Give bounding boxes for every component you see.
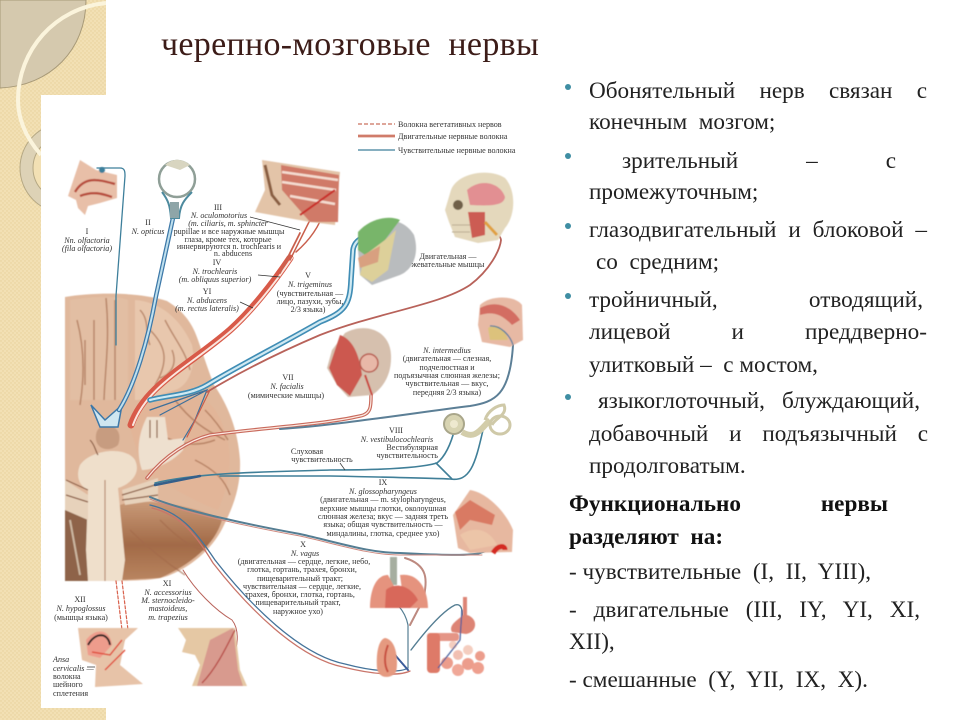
label XI: N. accessorius bbox=[143, 588, 192, 597]
label X bbox=[238, 540, 370, 616]
text: olfactory nerve cont.: конечным мозгом; bbox=[589, 109, 775, 135]
label XI: m. trapezius bbox=[148, 613, 188, 622]
label III: n. abducens bbox=[214, 249, 252, 258]
label leader lines bbox=[87, 217, 345, 667]
legend bbox=[358, 120, 516, 155]
label masticatory: Двигательная — bbox=[420, 252, 477, 261]
label V bbox=[277, 271, 344, 314]
label VII bbox=[248, 373, 324, 400]
label X: наружное ухо) bbox=[273, 607, 323, 616]
nerve VIII bbox=[155, 428, 483, 485]
label V: (чувствительная — bbox=[277, 289, 344, 298]
label IX: языка; общая чувствительность — bbox=[323, 520, 444, 529]
label XII: XII bbox=[74, 595, 86, 604]
label VII: N. facialis bbox=[269, 382, 304, 391]
text: optic nerve cont.: промежуточным; bbox=[589, 179, 758, 205]
label III bbox=[174, 203, 285, 258]
label X: чувствительная — сердце, легкие, bbox=[243, 582, 361, 591]
label III: глаза, кроме тех, которые bbox=[184, 235, 272, 244]
bullet: oculomotor bbox=[565, 223, 571, 229]
nerve X bbox=[150, 505, 462, 674]
legend: Чувствительные нервные волокна bbox=[398, 146, 516, 155]
illustration: eye bbox=[159, 160, 195, 218]
heading: functional division: Функционально нервы bbox=[569, 491, 888, 517]
label X: пищеварительный тракт, bbox=[255, 598, 341, 607]
label intermedius: подъязычная слюнная железы; bbox=[394, 371, 500, 380]
label I: Nn. olfactoria bbox=[63, 236, 110, 245]
illustration: oral cavity bbox=[453, 490, 513, 553]
label VIII: VIII bbox=[389, 426, 403, 435]
motor branch to jaw muscles bbox=[207, 232, 501, 392]
label VIII: Слуховая bbox=[291, 447, 323, 456]
label XII bbox=[54, 595, 108, 622]
label VIII: N. vestibulocochlearis bbox=[360, 435, 433, 444]
illustration: intestines bbox=[427, 597, 485, 676]
label VI bbox=[175, 287, 239, 313]
text: facial nerve: лицевой и преддверно- bbox=[589, 319, 927, 345]
label III: pupillae и все наружные мышцы bbox=[174, 227, 285, 236]
label intermedius: чувствительная — вкус, bbox=[405, 379, 489, 388]
nerve II bbox=[91, 218, 173, 427]
heading: functional division cont.: разделяют на: bbox=[569, 524, 723, 550]
illustration: facial muscles head bbox=[327, 328, 391, 397]
label V: N. trigeminus bbox=[287, 280, 332, 289]
label VIII: Вестибулярная bbox=[386, 443, 438, 452]
illustration: sensory face map bbox=[358, 218, 416, 285]
brain bbox=[65, 294, 240, 581]
text: oculomotor nerve cont.: со средним; bbox=[596, 249, 719, 275]
label III: иннервируются n. trochlearis и bbox=[177, 242, 282, 251]
nerve XI bbox=[183, 570, 237, 655]
illustration: inner ear bbox=[444, 405, 510, 435]
nerve I bbox=[97, 168, 125, 345]
illustration: kidney bbox=[377, 638, 397, 677]
label VI: N. abducens bbox=[186, 296, 227, 305]
nerve labels bbox=[52, 203, 500, 698]
illustration: neck muscles bbox=[178, 628, 247, 686]
title: черепно-мозговые нервы bbox=[161, 26, 539, 63]
label intermedius bbox=[394, 346, 500, 397]
label IV bbox=[179, 258, 252, 284]
label X: трахея, бронхи, глотка, гортань, bbox=[245, 590, 355, 599]
bullet: optic bbox=[565, 153, 571, 159]
label X: X bbox=[300, 540, 306, 549]
label VIII: чувствительность bbox=[291, 455, 353, 464]
label I bbox=[62, 227, 112, 253]
label IV: N. trochlearis bbox=[192, 267, 237, 276]
label III: N. oculomotorius bbox=[190, 211, 247, 220]
label XII: (мышцы языка) bbox=[54, 613, 108, 622]
text: optic nerve: зрительный – с bbox=[622, 148, 896, 174]
label II: N. opticus bbox=[131, 227, 164, 236]
illustration: tongue and palate bbox=[478, 298, 523, 347]
illustration: orbit bbox=[255, 160, 340, 225]
label IV: (m. obliquus superior) bbox=[179, 275, 252, 284]
text: medulla: продолговатым. bbox=[589, 453, 746, 479]
label VI: (m. rectus lateralis) bbox=[175, 304, 239, 313]
label VII: VII bbox=[282, 373, 294, 382]
brainstem bbox=[78, 451, 137, 581]
nerve V bbox=[150, 238, 362, 440]
nerve VII and intermedius bbox=[147, 345, 513, 478]
label IX bbox=[318, 478, 448, 538]
list: motor cont.: XII), bbox=[569, 629, 615, 655]
list: mixed: - смешанные (Y, YII, IX, X). bbox=[569, 667, 868, 693]
label V: лицо, пазухи, зубы, bbox=[277, 297, 343, 306]
label intermedius: (двигательная — слезная, bbox=[403, 354, 491, 363]
list: motor: - двигательные (III, IY, YI, XI, bbox=[569, 597, 920, 623]
label VIII: чувствительность bbox=[377, 451, 438, 460]
label II bbox=[131, 218, 164, 236]
label VII: (мимические мышцы) bbox=[248, 391, 324, 400]
text: oculomotor nerve: глазодвигательный и блоковой – bbox=[589, 217, 927, 243]
label VI: YI bbox=[203, 287, 212, 296]
label ansa cervicalis: Ansa bbox=[52, 655, 69, 664]
nerves III IV VI bbox=[131, 213, 323, 425]
bullet: trigeminal bbox=[565, 293, 571, 299]
label ansa cervicalis: шейного bbox=[53, 680, 83, 689]
label IX: верхние мышцы глотки, околоушная bbox=[320, 504, 446, 513]
label III: III bbox=[214, 203, 222, 212]
text: olfactory nerve: Обонятельный нерв связан с bbox=[589, 78, 927, 104]
list: sensory: - чувствительные (I, II, YIII), bbox=[569, 559, 871, 585]
legend: Волокна вегетативных нервов bbox=[398, 120, 502, 129]
bullet: glossopharyngeal bbox=[565, 394, 571, 400]
nerve IX bbox=[150, 497, 498, 555]
label II: II bbox=[145, 218, 151, 227]
label IX: слюнная железа; вкус — задняя треть bbox=[318, 512, 448, 521]
nerve bundles bbox=[91, 168, 513, 674]
label V: 2/3 языка) bbox=[291, 305, 326, 314]
label ansa cervicalis: cervicalis — bbox=[53, 664, 94, 673]
bullet: olfactory bbox=[565, 84, 571, 90]
illustration: skull bbox=[445, 173, 513, 243]
label ansa cervicalis bbox=[52, 655, 94, 698]
label X: N. vagus bbox=[290, 549, 319, 558]
text: glossopharyngeal nerve: языкоглоточный, блуждающий, bbox=[598, 388, 920, 414]
label X: пищеварительный тракт; bbox=[257, 574, 343, 583]
label XI bbox=[140, 579, 195, 622]
label I: (fila olfactoria) bbox=[62, 244, 112, 253]
label IV: IV bbox=[213, 258, 221, 267]
label intermedius: N. intermedius bbox=[422, 346, 471, 355]
text: accessory nerves: добавочный и подъязычный с bbox=[589, 421, 928, 447]
label intermedius: передняя 2/3 языка) bbox=[413, 388, 481, 397]
label IX: (двигательная — m. stylopharyngeus, bbox=[320, 495, 446, 504]
legend: Двигательные нервные волокна bbox=[398, 132, 508, 141]
nerve XII bbox=[105, 581, 128, 670]
label masticatory: жевательные мышцы bbox=[411, 260, 485, 269]
label III: (m. ciliaris, m. sphincter bbox=[188, 219, 269, 228]
label IX: N. glossopharyngeus bbox=[348, 487, 417, 496]
label X: глотка, гортань, трахея, бронхи, bbox=[247, 565, 357, 574]
label VIII bbox=[291, 426, 438, 464]
label V: V bbox=[305, 271, 311, 280]
label masticatory bbox=[411, 252, 485, 269]
illustration: nose bbox=[68, 160, 117, 215]
label XI: M. sternocleido- bbox=[140, 596, 195, 605]
illustration: tongue-neck head bbox=[78, 628, 143, 687]
illustration: lungs and heart bbox=[370, 557, 428, 608]
label ansa cervicalis: сплетения bbox=[53, 689, 88, 698]
text: vestibulocochlear nerve: улитковый – с мостом, bbox=[589, 352, 818, 378]
label I: I bbox=[86, 227, 89, 236]
label XI: mastoideus, bbox=[149, 604, 187, 613]
label X: (двигательная — сердце, легкие, небо, bbox=[238, 557, 370, 566]
label IX: IX bbox=[379, 478, 387, 487]
label XII: N. hypoglossus bbox=[55, 604, 106, 613]
label IX: миндалины, глотка, среднее ухо) bbox=[327, 529, 440, 538]
label intermedius: подчелюстная и bbox=[419, 363, 475, 372]
label ansa cervicalis: волокна bbox=[53, 672, 81, 681]
label XI: XI bbox=[163, 579, 172, 588]
text: trigeminal nerve: тройничный, отводящий, bbox=[589, 287, 923, 313]
